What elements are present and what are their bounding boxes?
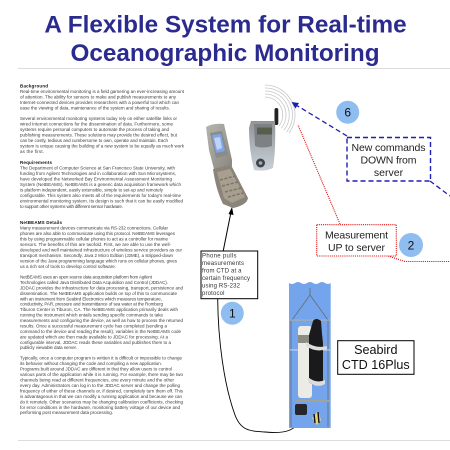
arrow: measurement up to server (298, 125, 450, 262)
background section: Internet-connected devices provides researchers with a powerful tool which can (20, 100, 179, 105)
arrow: commands down to phone (292, 102, 450, 196)
badge 6 (336, 101, 359, 124)
NetBEAMS details section: frequency of either of these channels or, if desired, completely turn them off. This (20, 388, 184, 394)
requirements section: is platform independent, easily extensible, simple to set-up and remotely (20, 187, 164, 192)
callout: phone pulls measurements (201, 251, 258, 299)
badge 6: 6 (344, 106, 351, 120)
callout: phone pulls measurements: measurements (202, 261, 244, 267)
requirements section: to support other systems with different sensor hardware. (20, 204, 123, 209)
arrow: to phone (223, 207, 234, 252)
NetBEAMS details section: for error conditions in the hardware, monitoring battery voltage of our device and (20, 405, 180, 410)
requirements section: environmental monitoring system. Its design is such that it can be easily modified (20, 198, 183, 203)
NetBEAMS details section: NetBEAMS uses an open source data acquisition platform from Agilent (20, 274, 153, 280)
callout: measurement (317, 225, 396, 256)
NetBEAMS details section: its behavior without changing the code and compiling a new application. (20, 361, 162, 366)
NetBEAMS details section: version of the Java programming language which runs on cellular phones, gives (20, 258, 178, 264)
label: Seabird CTD 16Plus: Seabird (354, 343, 398, 357)
NetBEAMS details section: running the instrument which entails sending specific commands to take (20, 312, 163, 317)
title (44, 12, 407, 67)
requirements section: The Department of Computer Science at San Francisco State University, with (20, 165, 175, 170)
requirements section: System (NetBEAMS). NetBEAMS is a generic data acquisition framework which (20, 182, 181, 187)
requirements section: have developed the Networked Bay Environmental Assessment Monitoring (20, 176, 172, 181)
requirements section: funding from Agilent Technologies and in collaboration with Sun Microsystems, (20, 171, 176, 176)
callout: new commands: New commands (352, 142, 426, 154)
NetBEAMS details section: JDDAC provides the infrastructure for data processing, transport, persistence and (20, 286, 183, 290)
NetBEAMS details section: transport mechanism. Secondly, Java 2 Micro Edition (J2ME), a stripped-down (20, 253, 173, 258)
callout: phone pulls measurements: Phone pulls (202, 254, 236, 260)
requirements section: Requirements (20, 160, 52, 165)
cable from phone to CTD (218, 299, 302, 433)
callout: new commands (347, 138, 430, 181)
badge 2 (399, 233, 423, 257)
callout: phone pulls measurements: certain frequency (202, 276, 250, 282)
NetBEAMS details section: Programs built around JDDAC are different in that they allow users to control (20, 366, 172, 372)
badge 1: 1 (229, 306, 236, 320)
NetBEAMS details section: is advantageous in that we can modify a running application and because we can (20, 394, 182, 399)
NetBEAMS details section: dissemination. The NetBEAMS application builds on top of this to communicate (20, 291, 177, 296)
callout: measurement: Measurement (325, 230, 388, 242)
callout: phone pulls measurements: from CTD at a (202, 268, 242, 274)
NetBEAMS details section: Typically, once a computer program is written it is difficult or impossible to change (20, 356, 182, 360)
label: Seabird CTD 16Plus: CTD 16Plus (342, 358, 410, 372)
requirements section: configurable. This system also meets all of the requirements for today's real-time (20, 193, 181, 198)
NetBEAMS details section: every day. Administrators can log in to the JDDAC server and change the polling (20, 383, 180, 388)
callout: new commands: DOWN from (360, 154, 417, 166)
NetBEAMS details section: Many measurement devices communicate via RS-232 connections. Cellular (20, 226, 168, 230)
callout: phone pulls measurements: protocol (202, 291, 224, 297)
NetBEAMS details section: channels being read at different frequencies, one every minute and the other (20, 378, 174, 382)
icon: flip phone (206, 124, 248, 208)
background section: systems require personal computers to automate the process of taking and (20, 127, 169, 132)
background section: Background (20, 84, 48, 88)
NetBEAMS details section: command to the device and reading the result), variables in the NetBEAMS code (20, 329, 181, 334)
NetBEAMS details section: conductivity, PAR, pressure and transmittance of sea water at the Romberg (20, 301, 163, 306)
NetBEAMS details section: phones are also able to communicate using this protocol. NetBEAMS leverages (20, 231, 176, 236)
icon: closed phone (249, 108, 278, 171)
requirements section (20, 160, 183, 209)
background section: of attention. The ability for sensors to make and publish measurements to any (20, 94, 177, 99)
NetBEAMS details section: Tiburon Center in Tiburon, CA. The NetBEAMS application primarily deals with (20, 307, 178, 312)
NetBEAMS details section: sensors. The benefits of this are twofold. First, we are able to use the well- (20, 242, 172, 247)
badge 2: 2 (408, 238, 415, 252)
title: Oceanographic Monitoring (70, 40, 380, 67)
callout: phone pulls measurements: using RS-232 (202, 284, 241, 290)
NetBEAMS details section: results. Once a successful measurement cycle has completed (sending a (20, 323, 167, 328)
NetBEAMS details section: with an instrument from Seabird Electronics which measures temperature, (20, 296, 162, 301)
background section (20, 84, 185, 154)
NetBEAMS details section: do it remotely. Other scenarios may be changing calibration coefficients, checking (20, 399, 183, 404)
NetBEAMS details section: publicly viewable data server. (20, 345, 77, 350)
NetBEAMS details section: are updated which are then made available to JDDAC for processing. At a (20, 334, 168, 339)
NetBEAMS details section: Technologies called Java Distributed Data Acquisition and Control (JDDAC). (20, 280, 168, 285)
NetBEAMS details section: configurable interval, JDDAC reads these variables and publishes them to a (20, 340, 171, 345)
background section: ease the viewing of data, maintenance of the system and sharing of results. (20, 105, 170, 110)
background section: publishing measurements. These solutions may provide the desired effect, but (20, 132, 178, 137)
icon: radio signal arcs (265, 85, 295, 133)
NetBEAMS details section: various parts of the application while it is running. For example, there may be two (20, 372, 183, 377)
callout: measurement: UP to server (328, 242, 386, 254)
background section: as the first. (20, 149, 44, 154)
background section: can be costly, tedious and cumbersome to own, operate and maintain. Each (20, 138, 168, 143)
badge 1 (221, 302, 244, 325)
NetBEAMS details section: performing post measurement data processing. (20, 410, 113, 415)
NetBEAMS details section: NetBEAMS Details (20, 220, 62, 225)
label: Seabird CTD 16Plus (338, 341, 414, 374)
title: A Flexible System for Real-time (44, 12, 407, 38)
NetBEAMS details section: this by using programmable cellular phones to act as a controller for marine (20, 236, 168, 242)
background section: wired Internet connections for the dissemination of data. Furthermore, some (20, 122, 173, 126)
NetBEAMS details section: measurements and configuring the device, as well as how to process the returned (20, 318, 183, 323)
background section: system is unique causing the building of a new system to be equally as much work (20, 143, 185, 148)
background section: Several environmental monitoring systems today rely on either satellite links or (20, 116, 178, 121)
CTD instrument in water (289, 282, 331, 428)
background section: Real-time environmental monitoring is a field garnering an ever-increasing amount (20, 89, 185, 94)
text column (20, 84, 185, 415)
NetBEAMS details section: developed and well maintained infrastructure of wireless service providers as our (20, 248, 182, 252)
callout: new commands: server (374, 167, 404, 179)
NetBEAMS details section: us a rich set of tools to develop control software. (20, 264, 116, 269)
NetBEAMS details section (20, 220, 184, 415)
